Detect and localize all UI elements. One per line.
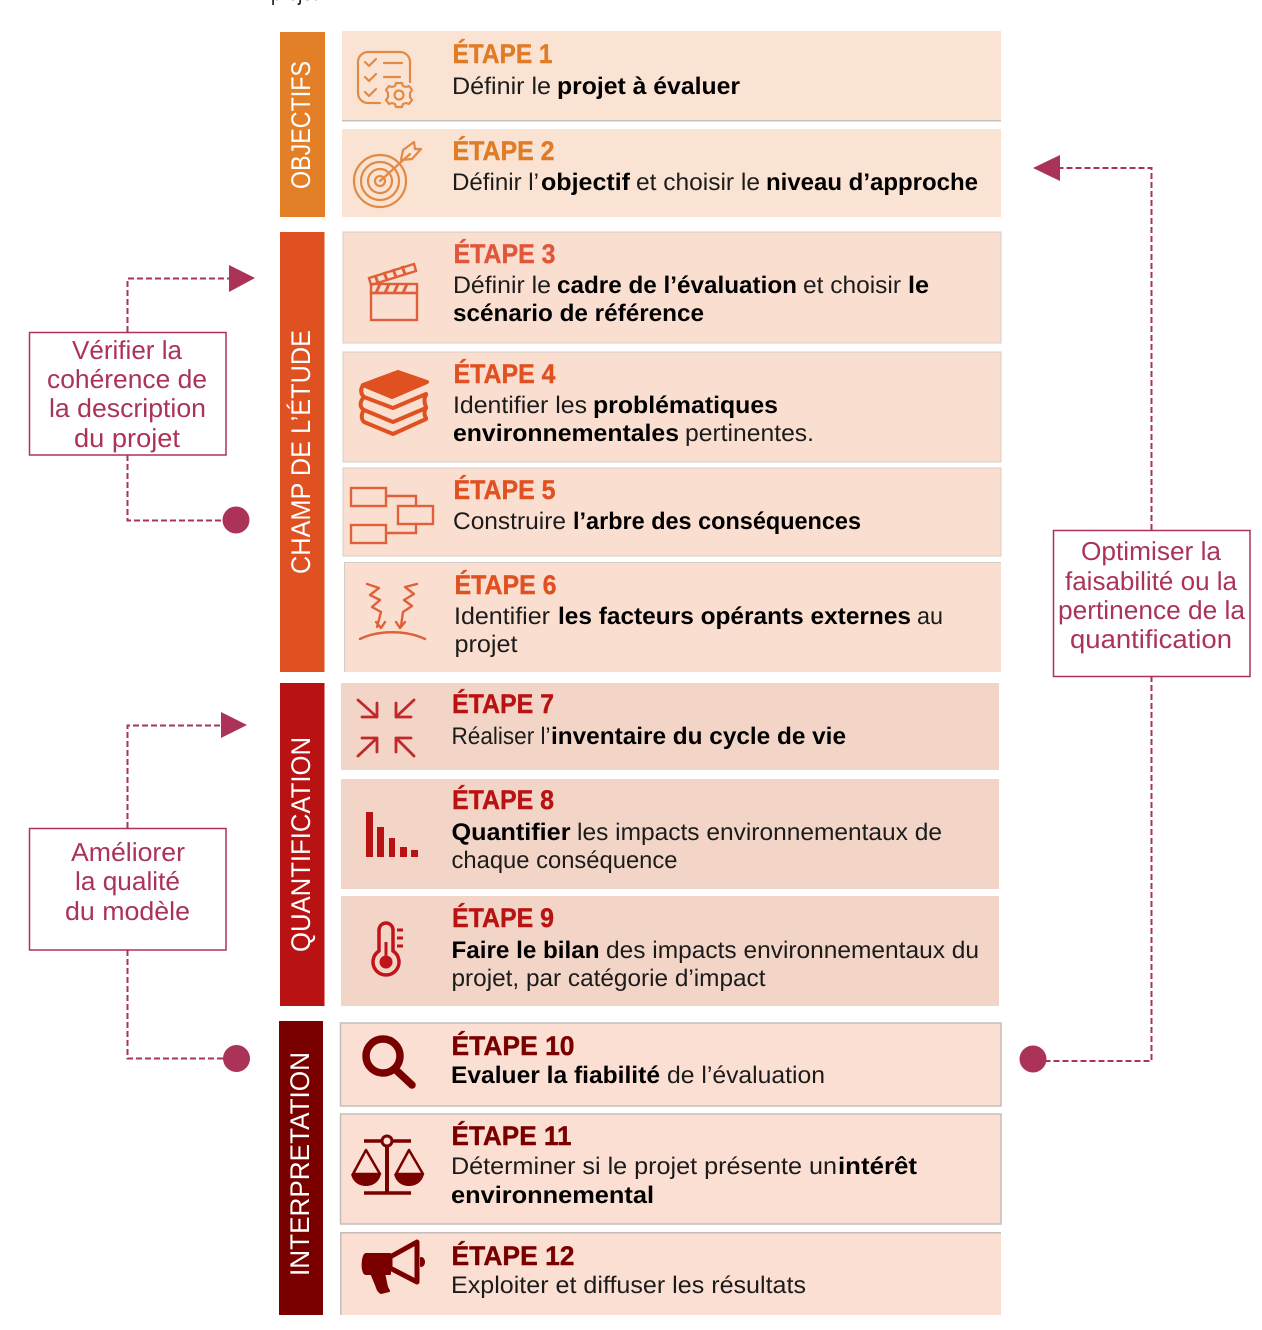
callout text <box>47 335 207 453</box>
panel: étape 2 <box>342 129 1001 217</box>
arrow: feedback to étape 3 <box>229 265 255 292</box>
description: les facteurs opérants externes <box>558 603 911 630</box>
dot: origin <box>1020 1046 1046 1072</box>
description <box>453 508 861 535</box>
description: au <box>917 603 943 630</box>
side label: CHAMP DE L'ÉTUDE: CHAMP DE L’ÉTUDE <box>286 330 316 574</box>
dot: origin <box>222 506 250 534</box>
description: les impacts environnementaux de <box>577 819 942 846</box>
description: et choisir <box>803 272 901 299</box>
icon: consequence tree <box>351 488 433 543</box>
description: projet <box>454 631 518 658</box>
panel: étape 12 <box>340 1232 1001 1315</box>
arrow: feedback to étape 7 <box>221 712 247 738</box>
description: Définir le <box>453 272 551 299</box>
icon: converging arrows <box>358 700 414 756</box>
heading: ÉTAPE 4 <box>454 359 556 389</box>
callout text: faisabilité ou la <box>1065 566 1238 596</box>
panel: étape 7 <box>341 683 999 770</box>
callout text <box>65 837 190 926</box>
description: cadre de l’évaluation <box>557 272 797 299</box>
callout text <box>1058 536 1246 654</box>
side label: OBJECTIFS: OBJECTIFS <box>286 61 316 189</box>
icon: clapperboard <box>369 264 417 320</box>
callout text: la qualité <box>75 866 180 896</box>
description: objectif <box>541 169 631 196</box>
heading: ÉTAPE 3 <box>454 239 556 269</box>
description: Evaluer la fiabilité <box>451 1062 660 1089</box>
description: Quantifier <box>452 819 570 846</box>
side label: INTERPRETATION: INTERPRETATION <box>285 1052 315 1276</box>
description <box>452 937 979 992</box>
description <box>454 603 943 658</box>
description: de l’évaluation <box>667 1062 825 1089</box>
callout: vérifier la cohérence <box>30 265 255 534</box>
heading: ÉTAPE 7 <box>452 689 554 719</box>
description: Définir l’ <box>452 169 539 196</box>
panel: étape 5 <box>343 468 1001 556</box>
description: projet, par catégorie d’impact <box>452 965 766 992</box>
description: Identifier <box>454 603 550 630</box>
description: chaque conséquence <box>452 847 678 874</box>
description: Exploiter et diffuser les résultats <box>451 1272 806 1299</box>
panel: étape 8 <box>341 779 999 889</box>
description: problématiques <box>593 392 778 419</box>
panel: étape 9 <box>341 896 999 1006</box>
heading: ÉTAPE 12 <box>452 1241 574 1271</box>
description: projet à évaluer <box>557 73 740 100</box>
panel: étape 1 <box>342 31 1001 122</box>
heading: ÉTAPE 8 <box>452 785 554 815</box>
callout text: cohérence de <box>47 364 207 394</box>
panel: étape 11 <box>340 1114 1001 1224</box>
description: Faire le bilan <box>452 937 600 964</box>
panel: étape 6 <box>344 562 1001 672</box>
heading: ÉTAPE 11 <box>452 1121 572 1151</box>
description <box>453 392 814 447</box>
panel: étape 4 <box>343 352 1001 462</box>
callout text: du modèle <box>65 896 190 926</box>
description: Réaliser l’ <box>452 723 550 750</box>
icon: bar chart <box>366 812 418 857</box>
description: intérêt <box>838 1153 917 1180</box>
description <box>452 819 942 874</box>
description: environnemental <box>451 1182 654 1209</box>
heading: ÉTAPE 9 <box>452 903 554 933</box>
icon: target <box>354 142 421 207</box>
callout text: la description <box>49 393 206 423</box>
description: Déterminer si le projet présente un <box>451 1153 837 1180</box>
panel: étape 10 <box>340 1023 1001 1106</box>
callout text: pertinence de la <box>1058 595 1246 625</box>
description: scénario de référence <box>453 300 704 327</box>
callout text: Vérifier la <box>72 335 183 365</box>
icon: scales <box>351 1136 424 1193</box>
icon: magnifier <box>366 1039 412 1085</box>
heading: ÉTAPE 5 <box>454 475 556 505</box>
callout text: quantification <box>1070 624 1232 654</box>
description: Construire <box>453 508 566 535</box>
callout text: Améliorer <box>71 837 185 867</box>
description: l’arbre des conséquences <box>573 508 861 535</box>
icon: books <box>361 372 427 434</box>
description: inventaire du cycle de vie <box>551 723 846 750</box>
callout: améliorer la qualité <box>30 712 250 1072</box>
heading: ÉTAPE 2 <box>452 136 554 166</box>
heading: ÉTAPE 6 <box>454 570 556 600</box>
icon: checklist with gear <box>358 52 412 107</box>
description <box>451 1153 917 1209</box>
callout text: Optimiser la <box>1081 536 1222 566</box>
heading: ÉTAPE 1 <box>452 39 552 69</box>
dot: origin <box>223 1045 250 1072</box>
description <box>452 169 978 196</box>
side label: OBJECTIFS <box>280 32 325 217</box>
description: le <box>908 272 929 299</box>
description: des impacts environnementaux du <box>606 937 979 964</box>
icon: external factors <box>360 584 425 639</box>
side label: CHAMP DE L'ÉTUDE <box>280 232 324 672</box>
callout: optimiser la faisabilité <box>1020 155 1250 1072</box>
icon: megaphone <box>363 1242 424 1293</box>
side label: QUANTIFICATION <box>280 683 324 1006</box>
description: pertinentes. <box>685 420 814 447</box>
arrow: feedback to étape 2 <box>1033 155 1060 181</box>
panel: étape 3 <box>343 232 1001 343</box>
description: niveau d’approche <box>766 169 978 196</box>
description: Définir le <box>452 73 551 100</box>
description: Identifier les <box>453 392 587 419</box>
icon: thermometer <box>373 923 403 975</box>
side label: INTERPRETATION <box>279 1021 323 1315</box>
description <box>452 73 740 100</box>
callout text: du projet <box>74 423 181 453</box>
side label: QUANTIFICATION: QUANTIFICATION <box>286 737 316 952</box>
heading: ÉTAPE 10 <box>452 1031 574 1061</box>
description <box>453 272 929 327</box>
description: et choisir le <box>636 169 760 196</box>
description: environnementales <box>453 420 679 447</box>
description <box>451 1062 825 1089</box>
